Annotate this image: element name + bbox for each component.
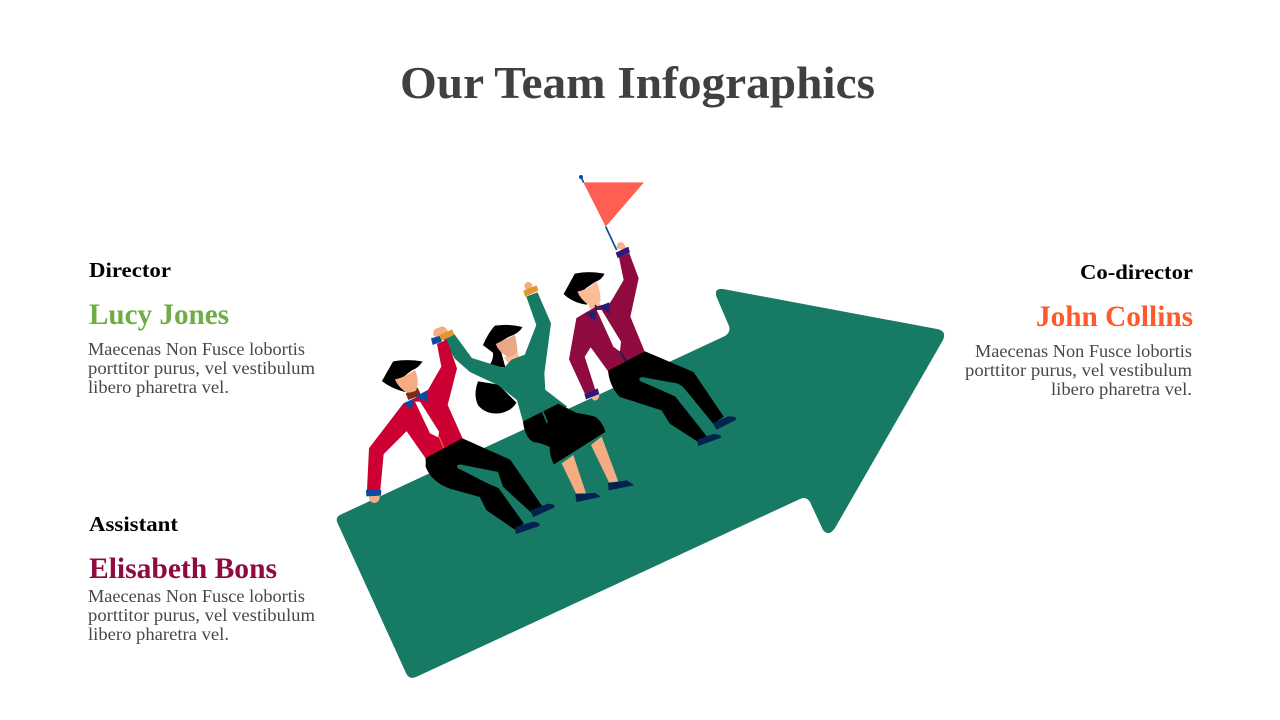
legs <box>562 437 618 493</box>
raised hand <box>433 326 448 340</box>
role: assistant: Assistant <box>89 512 179 536</box>
description: assistant: libero pharetra vel. <box>88 624 229 644</box>
figure: man in maroon with flag <box>564 175 736 446</box>
cuffs <box>584 247 630 399</box>
shoes <box>516 504 554 534</box>
figure: woman in green <box>443 282 633 502</box>
pole tip <box>579 175 583 179</box>
figure: man in red <box>366 326 554 534</box>
description: director: Maecenas Non Fusce lobortis <box>88 339 305 359</box>
description: co-director: libero pharetra vel. <box>1051 379 1192 399</box>
flag <box>583 182 644 227</box>
bow tie <box>403 391 428 409</box>
raised hand <box>524 282 532 290</box>
hair <box>382 360 422 392</box>
belt strap <box>543 412 547 423</box>
description: director <box>88 339 315 397</box>
description: assistant <box>88 586 315 644</box>
role: director: Director <box>89 258 171 282</box>
face <box>395 370 418 393</box>
description: director: porttitor purus, vel vestibulum <box>88 358 315 378</box>
title: Our Team Infographics <box>400 58 875 108</box>
jacket <box>569 253 644 393</box>
role: co-director: Co-director <box>1080 260 1193 284</box>
wrist band <box>523 285 538 297</box>
skirt <box>523 404 605 464</box>
arrow <box>337 289 944 678</box>
bow tie <box>586 302 610 322</box>
text block: assistant <box>88 512 315 644</box>
description: co-director <box>965 341 1192 399</box>
shoes <box>698 417 736 446</box>
trousers <box>608 352 723 442</box>
shirt and tie <box>415 402 439 437</box>
description: assistant: porttitor purus, vel vestibulum <box>88 605 315 625</box>
neck <box>588 302 602 312</box>
hair <box>483 325 522 367</box>
face <box>577 282 601 305</box>
hair bun <box>476 382 516 413</box>
lower hand <box>369 492 380 503</box>
flag pole <box>581 177 617 250</box>
jacket <box>367 340 462 490</box>
wrist band of woman in green <box>439 329 454 341</box>
trousers <box>426 439 542 529</box>
hair <box>564 272 604 304</box>
name: Elisabeth Bons: Elisabeth Bons <box>89 552 277 585</box>
face <box>496 335 517 357</box>
text block: director <box>88 258 315 397</box>
description: co-director: porttitor purus, vel vestibulum <box>965 360 1192 380</box>
neck <box>406 388 421 400</box>
hands <box>592 242 626 401</box>
description: co-director: Maecenas Non Fusce lobortis <box>975 341 1192 361</box>
description: assistant: Maecenas Non Fusce lobortis <box>88 586 305 606</box>
neck <box>504 352 522 368</box>
torso and arms <box>443 293 567 422</box>
shoes <box>576 481 633 502</box>
description: director: libero pharetra vel. <box>88 377 229 397</box>
name: Lucy Jones: Lucy Jones <box>89 298 229 331</box>
tie end <box>439 437 447 455</box>
text block: co-director <box>965 260 1193 399</box>
shirt and tie <box>597 310 621 352</box>
tie end <box>595 305 629 367</box>
cuffs <box>366 336 442 496</box>
name: John Collins: John Collins <box>1036 300 1193 333</box>
